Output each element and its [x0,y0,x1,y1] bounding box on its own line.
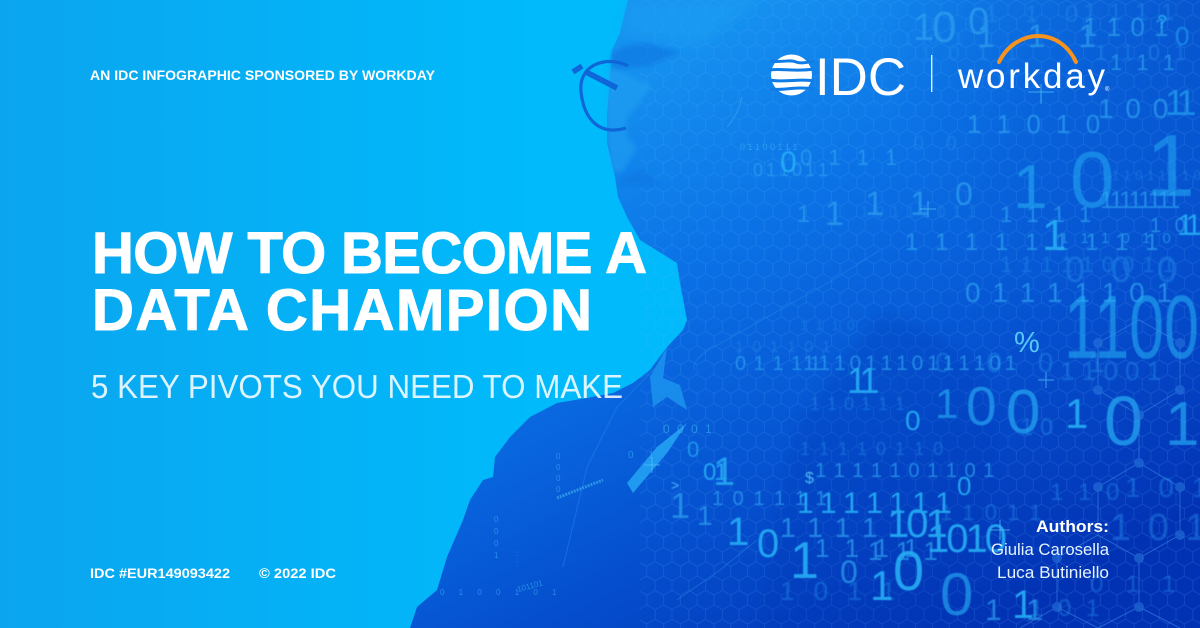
bright digits: 1 [1013,153,1047,222]
bright digits: 11 [1177,209,1200,242]
cheek highlight [607,66,652,172]
far background digits: 1 0 1 1 [780,576,902,606]
mid digits: 1 1 1 1 [815,533,923,563]
bright digits: 0 [687,437,699,462]
mid digits [670,1,1190,627]
mid digits: 1 1 1 1 [1000,202,1095,227]
footer id and copyright: © 2022 IDC [259,566,336,581]
mid digits: 0 [932,3,956,52]
subtitle: 5 KEY PIVOTS YOU NEED TO MAKE [91,368,623,405]
bright digits: 01 [703,459,727,486]
bright digits: 1 [1065,390,1088,437]
small body digits: 0 [556,463,561,472]
data dash line [557,480,603,498]
glasses [573,62,628,130]
small body digits [440,142,798,597]
authors: Giulia Carosella [991,540,1110,559]
bright digits: > [671,477,679,493]
hair shadow [611,44,680,70]
mid digits: 1 1 [985,594,1051,627]
bright digits: 1010 [927,517,1006,561]
bright digits: 0 [780,146,796,179]
bright digits: 0 [1175,21,1189,51]
bright digits: 0 [1104,382,1143,460]
far background digits: 1 1 1 0 [800,317,857,333]
mid digits: 1 1 0 1 0 [967,109,1104,139]
jacket lapel lines [563,250,880,600]
mid digits: 1 [913,7,934,49]
far background digits: 1 1 0 [1050,479,1123,506]
bright digits: 0 [1070,135,1114,224]
bright digits: 1 [727,510,749,554]
far background digits: 1 1 0 0 1 [1060,356,1161,386]
title [92,221,647,343]
mid digits: 1 0 0 [1098,93,1170,124]
mid digits: 1 1 1 0 1 1 1 0 1 1 1 1 0 1 [803,352,1016,375]
mid digits: 1 1 1 1 1 0 1 1 0 1 [815,460,995,482]
workday wordmark: workday [957,57,1106,96]
small body digits: 1 [494,551,499,560]
far background digits: 1 1 1 1 1 0 0 1 1 [1000,252,1176,277]
authors [991,517,1110,582]
binary digits pattern [440,0,1200,628]
workday arc [999,36,1076,62]
logo divider [931,55,932,92]
mid digits: 0 1 1 1 1 1 0 1 [965,277,1174,308]
small body digits: 0 0 0 1 [663,422,714,436]
far background digits: 1 1 0 1 1 [940,500,1044,525]
small body digits: : [516,559,518,568]
bright digits: 1 [713,450,735,494]
small body digits: 0 [556,474,561,483]
mid digits: 1 [697,500,713,531]
small body digits: 0 [494,527,499,536]
hexagon network [1020,320,1185,628]
title: HOW TO BECOME A [92,221,647,286]
small body digits: 0 [494,539,499,548]
mid digits: 1 1 1 1 1 1 1 1 1 [905,229,1163,256]
far background digits: 0 0 0 [1065,249,1185,290]
dark jacket shoulder [760,313,997,628]
bright digits: ? [1157,12,1167,32]
small body digits: 0 [556,452,561,461]
crosshair marks [644,84,1054,540]
IDC logo [770,48,906,107]
bright digits: 0 [966,375,997,437]
IDC globe icon [770,54,814,96]
mid digits: 1 1 0 1 [1083,12,1170,42]
far background digits: 1 1 0 1 [1095,40,1190,65]
small body digits: 101101 [516,578,544,594]
registered mark: ® [1105,86,1110,93]
small body digits: 0 1 1 0 0 1 1 1 [740,142,798,152]
mid digits: 0 [955,176,973,212]
mid digits: 1 1 1 [1110,50,1179,75]
mid digits: 1 1 1 0 1 0 [1060,230,1175,247]
bright digits: 1 1 1 1 1 1 1 [797,487,951,520]
far background digits: 0 1 1 [1090,571,1183,598]
authors: Luca Butiniello [997,563,1109,582]
mid digits: 0 [840,554,858,590]
far background digits: 1 1 1 1 0 1 1 0 [800,439,945,459]
bright digits: 11 [1165,82,1195,123]
mid digits: 0 1 1 1 [800,145,902,170]
far background digits: 0 0 [913,133,965,155]
mid digits: 1 [825,195,844,233]
bright digits: 1 [870,562,893,609]
lens reflection [727,97,742,127]
bright digits: 1 [1012,583,1034,627]
far background digits: 1 1 0 [985,1,1088,28]
lips [617,172,660,186]
footer id and copyright [90,566,336,581]
bright digits: 1 [790,532,819,590]
mid digits: 1 [910,185,929,223]
bright digits: 0 [940,561,973,628]
mid digits: 0 [968,1,989,43]
bright digits: 1 [1146,116,1195,215]
bright digits: 1 [1165,390,1199,459]
far background digits: 1 0 1 1 [920,43,1023,65]
far background digits: 1 1 0 1 1 1 [810,394,906,414]
top right shade [870,0,1200,330]
bright digits: $ [805,470,814,487]
title: DATA CHAMPION [92,278,592,343]
small body digits: 0 1 [628,450,660,461]
bright digits: 101 [887,502,946,546]
mid digits: 0 1 1 0 1 1 [753,160,828,180]
bright digits: 0 [905,405,921,436]
mid digits: 1 1 1 [977,18,1108,54]
bright digits: 0 [757,522,779,566]
bright digits: 0 [893,539,924,602]
far background digits: 1 0 1 1 0 1 [735,339,833,356]
bright digits: 0 [957,471,971,501]
mid digits: 1 1 1 1 [780,512,880,543]
mid digits: 0 1 1 1 1 [735,353,822,375]
small body digits: 0 [494,515,499,524]
hexagon texture [640,0,1200,628]
far background digits: 1 0 1 1 1 0 1 1 [860,204,977,221]
far background digits: 1 0 [1020,414,1053,441]
mid digits: 1 1 1 [868,536,941,566]
mid digits: 1 0 [1150,215,1190,237]
mid digits: 1 [797,201,810,228]
IDC wordmark: IDC [815,48,906,107]
mid digits: 1 [865,185,884,223]
person silhouette [410,0,1200,628]
authors: Authors: [1036,517,1109,536]
footer id and copyright: IDC #EUR149093422 [90,566,230,581]
bright digits: 1 [935,380,958,427]
forehead highlight [620,0,760,45]
small body digits: 0 1 0 0 1 0 1 [440,588,562,597]
shirt strip [627,423,687,493]
far background digits: 0 0 0 1 [935,347,1119,378]
small body digits: 0 [556,485,561,494]
mid digits: 1 [670,485,690,526]
bright digits: 11 [847,360,878,401]
sponsor line: AN IDC INFOGRAPHIC SPONSORED BY WORKDAY [90,68,435,83]
shirt collar [650,347,687,410]
bright digits: 1 [1042,211,1066,260]
far background digits: 1 0 1 0 1 [853,32,969,49]
workday logo [957,36,1110,96]
mid digits: 1 0 1 1 1 1 [712,488,829,510]
bright digits [671,12,1200,628]
mid digits: 11111111 [1100,187,1180,214]
far background digits: 1 0 1 [1030,595,1103,622]
bright digits: 0 [1006,378,1040,447]
far background digits [735,0,1200,622]
percent sign: % [1014,327,1040,359]
small body digits: : [516,549,518,558]
